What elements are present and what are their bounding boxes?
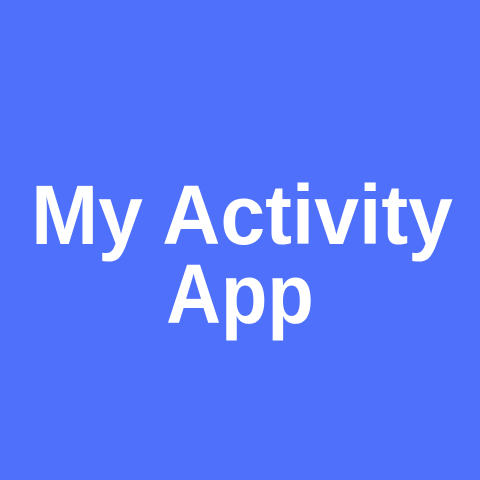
title: App — [166, 247, 314, 341]
title: My Activity — [31, 168, 453, 262]
title — [31, 168, 453, 341]
